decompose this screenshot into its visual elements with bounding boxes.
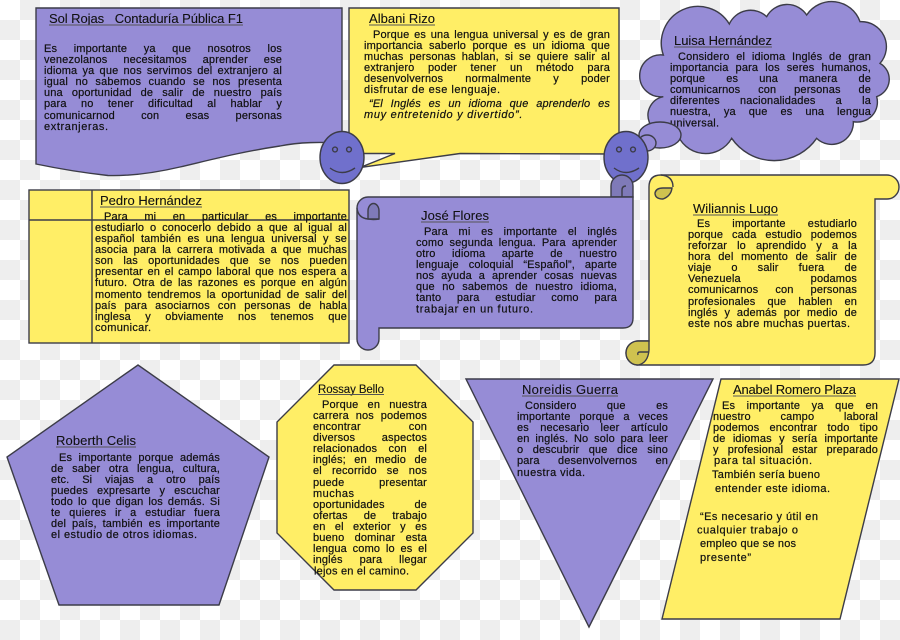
panel: Pedro Hernández table box [29, 190, 349, 343]
body text: Sol Rojas: comunicarnod con esas personas [44, 110, 282, 122]
body text: Noreidis Guerra: o descubrir que dice sino [517, 444, 668, 456]
heading: Luisa Hernández: Luisa Hernández [674, 33, 772, 48]
heading: José Flores: José Flores [421, 208, 490, 223]
body text: Luisa Hernández: diferentes nacionalidades a la [670, 95, 871, 107]
panel: Noreidis Guerra inverted triangle [466, 379, 713, 627]
body text: Pedro Hernández: país para asociarnos con personas de habla [95, 300, 347, 312]
body text: Pedro Hernández [95, 212, 347, 327]
body text: José Flores: que no sabemos de nuestro idioma, [416, 281, 617, 293]
quote: Anabel Romero Plaza [697, 511, 818, 564]
body text: José Flores: nos ayuda a aprender cosas nuevas [416, 270, 617, 282]
body text: Pedro Hernández: asocia para la carrera motivada a que muchas [95, 244, 347, 256]
body text: Pedro Hernández: español también es una lengua universal y se [95, 233, 347, 245]
quote: Anabel Romero Plaza: presente” [700, 552, 751, 564]
body text: Roberth Celis: de saber otra lengua, cultura, [51, 463, 220, 475]
panel: Anabel Romero Plaza parallelogram: para tal situación. [714, 455, 812, 467]
body text: Rossay Bello: muchas [313, 488, 355, 500]
body text: Albani Rizo: extranjero poder tener un método para [364, 62, 610, 74]
panel: José Flores purple scroll [357, 175, 633, 350]
body text: Albani Rizo [364, 30, 610, 125]
panel: Noreidis Guerra inverted triangle: nuestra vida. [517, 467, 585, 479]
body text: Wiliannis Lugo [688, 219, 857, 321]
heading: Roberth Celis: Roberth Celis [56, 433, 136, 448]
panel: Albani Rizo speech callout [349, 8, 619, 168]
body text: Sol Rojas: igual no sabemos cuando se nos presenta [44, 76, 282, 88]
body text: Sol Rojas: para no tener dificultad al hablar y [44, 98, 282, 110]
body text: Rossay Bello: carrera nos podemos [313, 410, 427, 422]
body text: José Flores: tanto para estudiar como para [416, 292, 617, 304]
heading: Sol Rojas Contaduría Pública F1: Sol Rojas Contaduría Pública F1 [49, 11, 243, 26]
body text: Wiliannis Lugo: comunicarnos con personas [688, 284, 857, 296]
body text: Rossay Bello: inglés; en medio de [313, 454, 427, 466]
icon: thought bubbles [638, 122, 681, 151]
body text: Wiliannis Lugo: porque cada estudio podemos [688, 229, 857, 241]
body text: Rossay Bello: diversos aspectos [313, 432, 427, 444]
body text: Pedro Hernández: son las oportunidades que se nos pueden [95, 255, 347, 267]
heading: Noreidis Guerra: Noreidis Guerra [522, 382, 619, 397]
body text: Roberth Celis: te quieres ir a estudiar fuera [51, 507, 220, 519]
body text: Luisa Hernández: nuestra, ya que es una lengua [670, 106, 871, 118]
panel: Roberth Celis pentagon [7, 365, 269, 605]
body text: Wiliannis Lugo: Venezuela podamos [688, 273, 857, 285]
body text: Pedro Hernández: futuro. Otra de las razones es porque en algún [95, 277, 347, 289]
panel: Roberth Celis pentagon: el estudio de otros idiomas. [51, 529, 197, 541]
body text: Sol Rojas: idioma ya que nos servimos del extranjero al [44, 65, 282, 77]
panel: Anabel Romero Plaza parallelogram: También sería bueno [712, 469, 820, 481]
body text: Albani Rizo: desenvolvernos normalmente y poder [364, 73, 610, 85]
body text: Wiliannis Lugo: viaje o salir fuera de [688, 262, 857, 274]
heading: Wiliannis Lugo: Wiliannis Lugo [693, 201, 778, 216]
body text: Roberth Celis: etc. Si viajas a otro país [51, 474, 220, 486]
body text: Noreidis Guerra: en inglés. No solo para leer [517, 433, 668, 445]
body text: Noreidis Guerra: importante porque a veces [517, 411, 668, 423]
body text: Anabel Romero Plaza: nuestro campo laboral [713, 411, 878, 423]
panel: Rossay Bello octagon [277, 365, 473, 590]
heading: Albani Rizo: Albani Rizo [369, 11, 435, 26]
panel: Luisa Hernández thought cloud [640, 2, 889, 161]
body text: Anabel Romero Plaza: podemos encontrar todo tipo [713, 422, 878, 434]
panel: Luisa Hernández thought cloud: universal. [670, 118, 719, 130]
panel: Pedro Hernández table box: comunicar. [95, 322, 151, 334]
icon: smiley face right [604, 132, 648, 184]
panel: Rossay Bello octagon: lejos en el camino. [314, 566, 409, 578]
body text: Rossay Bello [313, 400, 427, 570]
body text: Roberth Celis: todo lo que digan los demás. Si [51, 496, 220, 508]
body text: Pedro Hernández: momento tendremos la oportunidad de salir del [95, 289, 347, 301]
body text: Rossay Bello: puede presentar [313, 477, 427, 489]
body text: Roberth Celis [51, 453, 220, 533]
body text: Albani Rizo: importancia saberlo porque es un idioma que [364, 40, 610, 52]
body text: Pedro Hernández: inglesa y obviamente nos tenemos que [95, 311, 347, 323]
body text: Wiliannis Lugo: profesionales que hablen en [688, 296, 857, 308]
body text: Wiliannis Lugo: inglés y además por medio de [688, 307, 857, 319]
body text: Rossay Bello: encontrar con [313, 421, 427, 433]
heading: Pedro Hernández: Pedro Hernández [100, 193, 202, 208]
body text: Luisa Hernández: comunicarnos con personas de [670, 84, 871, 96]
body text: Albani Rizo: muchas personas hablan, si se quiere salir al [364, 51, 610, 63]
panel: Wiliannis Lugo yellow scroll: este nos abre muchas puertas. [688, 318, 850, 330]
body text: Wiliannis Lugo: hora del momento de salir de [688, 251, 857, 263]
panel: José Flores purple scroll: trabajar en un futuro. [416, 304, 533, 316]
body text: Pedro Hernández: estudiarlo o conocerlo debido a que al igual al [95, 222, 347, 234]
body text: Rossay Bello: el recorrido se nos [313, 465, 427, 477]
panel: Sol Rojas wave banner [36, 8, 342, 176]
body text: Anabel Romero Plaza: de idiomas y sería importante [713, 433, 878, 445]
body text: Albani Rizo: muy entretenido y divertido”. [364, 109, 523, 121]
body text: Sol Rojas: venezolanos necesitamos aprender ese [44, 54, 282, 66]
body text: Luisa Hernández [670, 52, 871, 122]
body text: Roberth Celis: del país, también es importante [51, 518, 220, 530]
heading: Anabel Romero Plaza: Anabel Romero Plaza [733, 382, 857, 397]
quote: Anabel Romero Plaza: “Es necesario y útil en [700, 511, 818, 523]
body text: Rossay Bello: relacionados con el [313, 443, 427, 455]
body text: Luisa Hernández: importancia para los seres humanos, [670, 62, 871, 74]
heading: Rossay Bello: Rossay Bello [318, 384, 384, 396]
body text: Rossay Bello: ofertas de trabajo [313, 510, 427, 522]
panel: Anabel Romero Plaza parallelogram [662, 379, 899, 619]
body text: José Flores [416, 227, 617, 307]
body text: Anabel Romero Plaza [713, 401, 878, 459]
body text: Noreidis Guerra [517, 401, 668, 471]
quote: Anabel Romero Plaza: cualquier trabajo o [697, 524, 798, 536]
body text: Sol Rojas [44, 44, 282, 136]
body text: Albani Rizo: “El Inglés es un idioma que aprenderlo es [369, 98, 610, 110]
body text: Sol Rojas: extranjeras. [44, 121, 109, 133]
body text: José Flores: otro idioma aparte de nuestro [416, 248, 617, 260]
body text: Rossay Bello: inglés para llegar [313, 554, 427, 566]
panel: Wiliannis Lugo yellow scroll [626, 175, 899, 365]
panel: Anabel Romero Plaza parallelogram: entender este idioma. [715, 483, 830, 495]
body text: Roberth Celis: puedes expresarte y escuchar [51, 485, 220, 497]
body text: Wiliannis Lugo: reforzar lo aprendido y a la [688, 240, 857, 252]
body text: Rossay Bello: en el exterior y es [313, 521, 427, 533]
body text: Rossay Bello: lengua como lo es el [313, 543, 427, 555]
body text: Noreidis Guerra: es necesario leer artículo [517, 422, 668, 434]
body text: Rossay Bello: bueno dominar esta [313, 532, 427, 544]
body text: Rossay Bello: oportunidades de [313, 499, 427, 511]
body text: Luisa Hernández: porque es una manera de [670, 73, 871, 85]
icon: smiley face left [320, 132, 364, 184]
quote: Anabel Romero Plaza: empleo que se nos [700, 538, 796, 550]
body text: José Flores: como segunda lengua. Para aprender [416, 237, 617, 249]
body text: Albani Rizo: disfrutar de ese lenguaje. [364, 84, 501, 96]
body text: Pedro Hernández: presentar en el campo laboral que nos espera a [95, 266, 347, 278]
body text: José Flores: lenguaje coloquial “Español”, aparte [416, 259, 617, 271]
body text: Noreidis Guerra: para desenvolvernos en [517, 455, 668, 467]
body text: Sol Rojas: una oportunidad de salir de nuestro país [44, 87, 282, 99]
body text: Anabel Romero Plaza: y profesional estar preparado [713, 444, 878, 456]
